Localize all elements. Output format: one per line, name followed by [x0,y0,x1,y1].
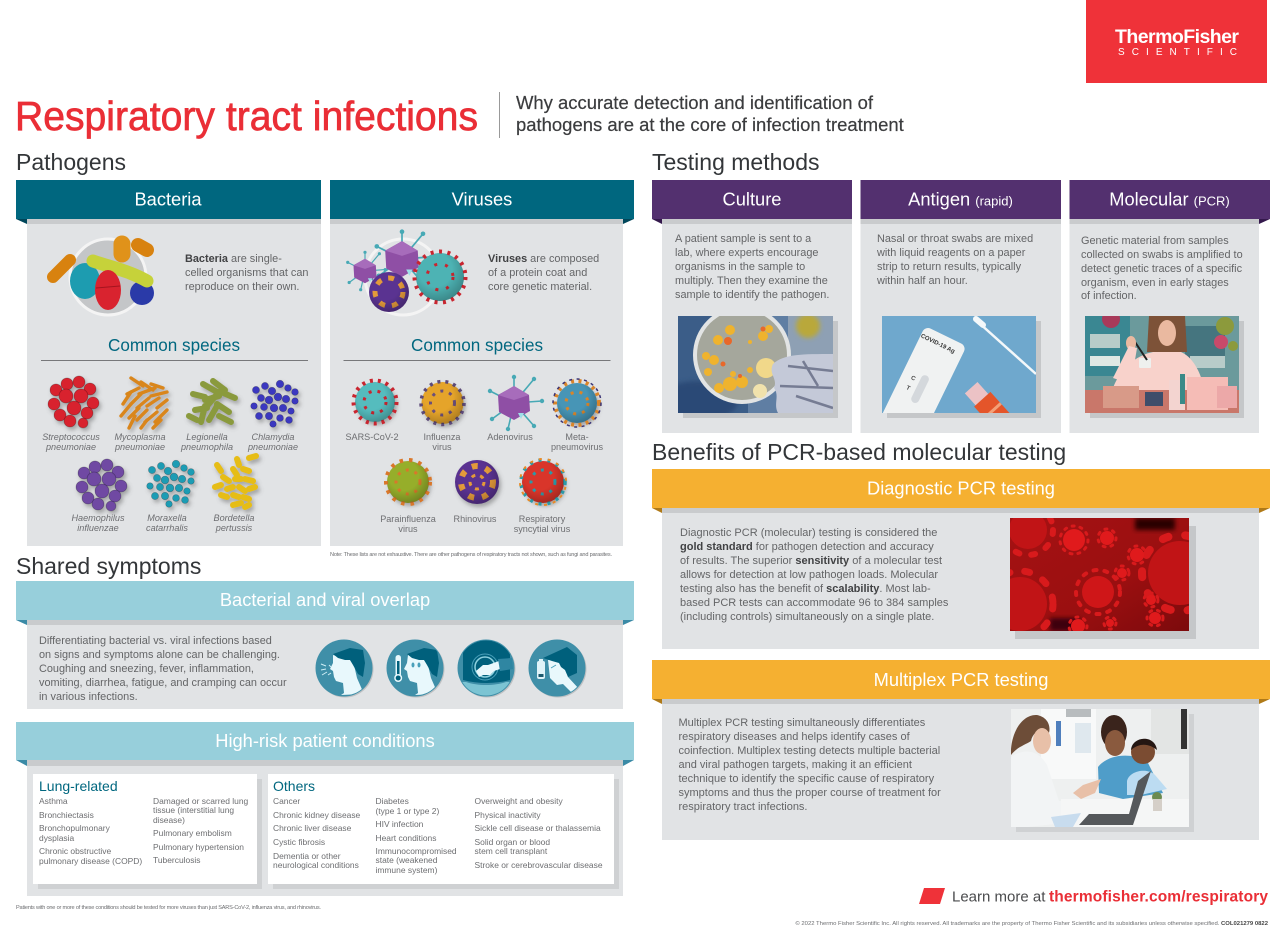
photo: red virus particles [987,505,1218,639]
icon: Haemophilus influenzae: influenzae [77,523,119,533]
icon: Chlamydia pneumoniae: Chlamydia [252,432,294,442]
icon: fever [386,640,444,698]
icon: Bordetella pertussis: pertussis [215,523,253,533]
panel: culture [652,180,852,433]
text: diagnostic description: (including controls) simultaneously on a single plate. [680,611,934,623]
card: others: Cancer [273,796,300,806]
call to action: learn more: Learn more at [952,888,1046,906]
photo: lab scientist [1085,310,1244,418]
text: diagnostic description: gold standard for pathogen detection and accuracy [680,541,934,553]
text: virus definition: core genetic material. [488,281,592,293]
logo: Thermo Fisher Scientific [1086,0,1267,83]
panel: bacterial and viral overlap: Bacterial and viral overlap [220,589,430,610]
card: others: neurological conditions [273,860,359,870]
call to action: learn more [919,888,1268,906]
text: culture description: A patient sample is sent to a [675,233,812,245]
icon: Legionella pneumophila: Legionella [186,432,228,442]
card: lung-related: tissue (interstitial lung [153,805,234,815]
icon: SARS-CoV-2: SARS-CoV-2 [345,432,399,442]
text: multiplex description: respiratory diseases and helps identify cases of [678,731,911,743]
icon: Adenovirus [488,375,544,431]
panel: antigen: Antigen (rapid) [908,188,1013,210]
text: molecular description: detect genetic traces of a specific [1081,263,1243,275]
icon: Respiratory syncytial virus: syncytial virus [514,524,571,534]
card: others: Immunocompromised [376,846,457,856]
panel: antigen [860,180,1061,463]
panel: molecular [1070,180,1270,433]
title: Respiratory tract infections [15,93,478,139]
footnote: patients: Patients with one or more of these conditions should be tested for more viruses than just SARS-CoV-2, influenza virus, and rhinovirus. [16,905,321,911]
card: others: stem cell transplant [474,846,548,856]
card: lung-related: Pulmonary embolism [153,828,232,838]
text: culture description [675,233,829,301]
illustration: virus group [346,229,466,315]
panel: high-risk patient conditions: High-risk patient conditions [215,730,435,751]
text: antigen description [876,233,1033,287]
text: molecular description: organism, even in early stages [1081,277,1229,289]
card: others [268,774,619,889]
panel: diagnostic PCR testing [652,469,1270,649]
panel: bacteria: Bacteria [134,188,202,210]
logo: Thermo Fisher Scientific: ThermoFisher [1115,26,1239,48]
text: diagnostic description: Diagnostic PCR (molecular) testing is considered the [680,527,937,539]
heading: Benefits: Benefits of PCR-based molecular testing [652,439,1066,465]
card: lung-related: Damaged or scarred lung [153,796,249,806]
footnote: pathogen lists: Note: These lists are not exhaustive. There are other pathogens of respiratory tracts not shown, such as fungi and parasites. [330,552,612,558]
panel: bacteria [16,180,321,546]
photo: antigen test: COVID-19 Ag [920,333,956,355]
icon: Metapneumovirus [551,379,603,452]
text: overlap description: vomiting, diarrhea, fatigue, and cramping can occur [39,677,287,689]
text: diagnostic description: of results. The superior sensitivity of a molecular test [680,555,942,567]
text: culture description: multiply. Then they examine the [675,275,828,287]
card: others: Heart conditions [376,833,436,843]
icon: Bordetella pertussis: Bordetella [214,513,254,523]
text: multiplex description: respiratory tract infections. [678,801,808,813]
heading: Shared symptoms: Shared symptoms [16,553,201,579]
icon: Parainfluenza virus: virus [398,524,418,534]
panel: molecular: Molecular (PCR) [1109,188,1230,210]
text: antigen description: within half an hour. [876,275,968,287]
icon: Haemophilus influenzae: Haemophilus [71,513,125,523]
icon: Streptococcus pneumoniae: pneumoniae [45,442,96,452]
subtitle [499,92,904,138]
icon: Moraxella catarrhalis [146,460,194,533]
text: culture description: sample to identify the pathogen. [675,289,829,301]
illustration: bacteria group [53,239,154,315]
text: antigen description: with liquid reagents on a paper [876,247,1026,259]
icon: Parainfluenza virus: Parainfluenza [380,514,437,524]
icon: Legionella pneumophila [180,381,235,452]
icon: fatigue [528,640,586,698]
text: antigen description: strip to return results, typically [877,261,1022,273]
text: bacteria definition: Bacteria are single- [185,253,282,265]
text: multiplex description: Multiplex PCR testing simultaneously differentiates [678,717,926,729]
icon: Rhinovirus [454,460,499,524]
photo: petri dish [658,306,838,421]
text: diagnostic description: testing also has the benefit of scalability. Most lab- [680,583,931,595]
text: overlap description: in various infections. [39,691,138,703]
icon: Influenza virus: virus [432,442,452,452]
photo: antigen test: S [892,435,900,443]
icon: Metapneumovirus: Meta- [565,432,589,442]
icon: Parainfluenza virus [380,460,437,534]
panel: multiplex PCR testing: Multiplex PCR testing [874,669,1048,690]
icon: Moraxella catarrhalis: Moraxella [147,513,187,523]
text: overlap description: Coughing and sneezing, fever, inflammation, [39,663,254,675]
card: lung-related: pulmonary disease (COPD) [39,856,142,866]
heading: Pathogens: Pathogens [16,149,126,175]
panel: culture: Culture [723,188,781,210]
subtitle: Why accurate detection and identification of [516,92,874,113]
text: molecular description: collected on swabs is amplified to [1081,249,1243,261]
text: overlap description [39,635,287,703]
card: lung-related: Bronchiectasis [39,810,94,820]
card: others: state (weakened [376,855,438,865]
card: others: Diabetes [376,796,409,806]
card: others: Others [273,778,315,794]
text: overlap description: Differentiating bacterial vs. viral infections based [39,635,272,647]
card: others: immune system) [376,865,438,875]
copyright: © 2022 Thermo Fisher Scientific Inc. All rights reserved. All trademarks are the property of Thermo Fisher Scientific and its subsidiaries unless otherwise specified. COL021279 0822 [795,920,1269,927]
heading: common species bacteria: Common species [108,336,240,355]
card: lung-related: Tuberculosis [153,855,201,865]
icon: Streptococcus pneumoniae: Streptococcus [42,432,100,442]
card: others: (type 1 or type 2) [376,806,439,816]
text: virus definition: Viruses are composed [488,253,599,265]
text: molecular description: of infection. [1081,290,1137,302]
icon: Respiratory syncytial virus: Respiratory [519,514,566,524]
text: multiplex description: and viral pathogen targets, making it an efficient [678,759,912,771]
icon: Mycoplasma pneumoniae: Mycoplasma [114,432,166,442]
icon: Mycoplasma pneumoniae [114,378,167,452]
card: others: Dementia or other [273,851,341,861]
icon: coughing [316,640,374,698]
card: lung-related: dysplasia [39,833,74,843]
icon: Respiratory syncytial virus [514,459,571,534]
text: overlap description: on signs and symptoms alone can be challenging. [39,649,280,661]
heading: common species viruses: Common species [411,336,543,355]
text: culture description: organisms in the sample to [675,261,805,273]
text: multiplex description: coinfection. Multiplex testing detects multiple bacterial [678,745,940,757]
panel: bacterial and viral overlap [16,581,634,709]
text: bacteria definition [185,253,308,293]
icon: Legionella pneumophila: pneumophila [180,442,233,452]
text: diagnostic description: based PCR tests can accommodate 96 to 384 samples [680,597,949,609]
text: virus definition: of a protein coat and [488,267,587,279]
panel: viruses [330,180,634,546]
icon: Bordetella pertussis [214,456,256,533]
text: molecular description: Genetic material from samples [1081,235,1229,247]
icon: Chlamydia pneumoniae [247,380,298,452]
icon: SARS-CoV-2 [345,380,399,442]
card: others: Cystic fibrosis [273,837,325,847]
card: others: Stroke or cerebrovascular disease [474,860,603,870]
icon: Rhinovirus: Rhinovirus [454,514,497,524]
card: lung-related [33,774,262,889]
subtitle: pathogens are at the core of infection treatment [516,114,904,135]
text: bacteria definition: reproduce on their own. [185,281,299,293]
label: Adenovirus: Adenovirus [487,432,533,442]
text: diagnostic description: allows for detection at low pathogen loads. Molecular [680,569,938,581]
panel: diagnostic PCR testing: Diagnostic PCR testing [867,478,1055,498]
icon: Mycoplasma pneumoniae: pneumoniae [114,442,165,452]
card: others: Physical inactivity [474,810,541,820]
card: lung-related: Asthma [39,796,68,806]
text: multiplex description [678,717,941,813]
panel: multiplex PCR testing [652,660,1270,840]
card: lung-related: disease) [153,815,185,825]
text: virus definition [488,253,599,293]
call to action: learn more: thermofisher.com/respiratory [1049,888,1268,906]
card: others: Overweight and obesity [474,796,563,806]
text: molecular description [1081,235,1243,302]
panel: high-risk patient conditions [16,722,634,896]
text: bacteria definition: celled organisms that can [185,267,308,279]
icon: Chlamydia pneumoniae: pneumoniae [247,442,298,452]
card: others: Solid organ or blood [474,837,550,847]
card: lung-related: Bronchopulmonary [39,823,111,833]
icon: Influenza virus [421,382,464,452]
card: others: HIV infection [376,819,424,829]
card: lung-related: Pulmonary hypertension [153,842,244,852]
card: others: Chronic liver disease [273,823,352,833]
card: lung-related: Chronic obstructive [39,846,112,856]
text: antigen description: Nasal or throat swabs are mixed [877,233,1033,245]
card: others: Sickle cell disease or thalassemia [474,823,601,833]
card: others: Chronic kidney disease [273,810,361,820]
heading: Testing methods: Testing methods [652,149,819,175]
photo: antigen test: T [905,385,911,392]
icon: Haemophilus influenzae [71,459,127,533]
text: diagnostic description [680,527,949,623]
icon: Influenza virus: Influenza [424,432,461,442]
text: culture description: lab, where experts encourage [675,247,818,259]
icon: Streptococcus pneumoniae [42,376,100,452]
icon: Metapneumovirus: pneumovirus [551,442,603,452]
text: multiplex description: symptoms and thus the proper course of treatment for [678,787,941,799]
photo: doctor with mother and child [1011,709,1194,832]
text: multiplex description: technique to identify the specific cause of respiratory [678,773,935,785]
icon: cramping [456,638,516,698]
logo: Thermo Fisher Scientific: SCIENTIFIC [1118,47,1237,58]
panel: viruses: Viruses [452,188,512,210]
icon: Moraxella catarrhalis: catarrhalis [146,523,188,533]
card: lung-related: Lung-related [39,778,118,794]
photo: antigen test: C [910,375,917,383]
photo: antigen test [868,316,1041,463]
